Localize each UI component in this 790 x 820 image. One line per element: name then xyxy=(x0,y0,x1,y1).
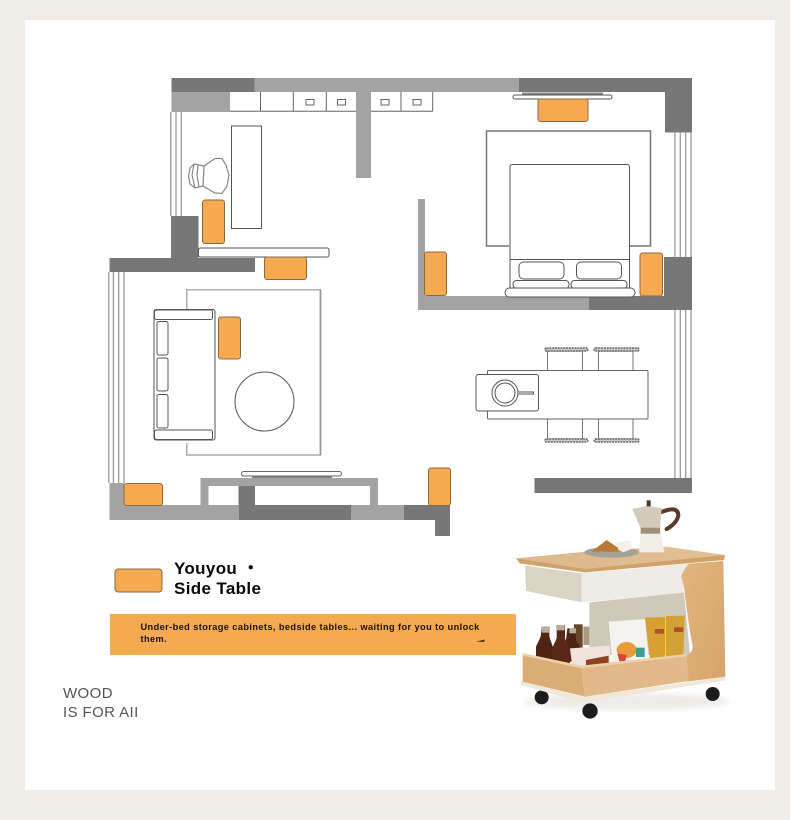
base strip xyxy=(521,677,725,703)
side table markers xyxy=(124,99,662,506)
floor plan xyxy=(109,78,692,536)
banner: them. xyxy=(140,634,167,644)
shadow xyxy=(523,693,730,710)
yellow cans xyxy=(645,616,685,659)
heading xyxy=(174,559,261,598)
product photo: side table xyxy=(516,500,730,719)
coffee table xyxy=(235,372,294,431)
TV cabinet xyxy=(200,472,378,505)
drawer xyxy=(525,566,582,602)
heading: Side Table xyxy=(174,579,261,598)
bedroom TV xyxy=(513,92,612,99)
back panel xyxy=(589,592,690,655)
brand text: WOOD xyxy=(63,685,113,702)
lower tray xyxy=(523,654,585,697)
icon: office chair xyxy=(188,158,229,194)
living room rug xyxy=(187,290,320,455)
brand text xyxy=(63,685,139,721)
heading: Youyou ・ xyxy=(174,559,260,578)
chair backs xyxy=(545,348,639,442)
snack box xyxy=(570,646,610,668)
casters xyxy=(535,687,720,719)
side wood panel xyxy=(681,561,725,682)
legend: side table marker xyxy=(115,569,162,592)
bedroom rug xyxy=(486,131,650,246)
dining table and chairs xyxy=(476,348,648,442)
sofa xyxy=(154,310,215,440)
brand text: IS FOR AII xyxy=(63,704,139,721)
bed xyxy=(505,164,635,297)
banner: Under-bed storage cabinets, bedside tables... waiting for you to unlock xyxy=(140,622,480,632)
banner xyxy=(110,614,516,655)
icon: moka pot xyxy=(632,500,678,552)
desk xyxy=(232,126,262,228)
dining chairs xyxy=(548,351,633,439)
low shelf xyxy=(198,248,329,257)
tray with cup xyxy=(476,374,538,411)
wardrobe cabinets xyxy=(230,92,433,111)
plate with pastry xyxy=(584,540,639,558)
dining table xyxy=(488,370,648,419)
walls xyxy=(110,78,692,536)
windows xyxy=(109,112,691,483)
snack pouch xyxy=(609,619,649,664)
tabletop xyxy=(516,547,725,572)
bottles xyxy=(536,624,589,665)
